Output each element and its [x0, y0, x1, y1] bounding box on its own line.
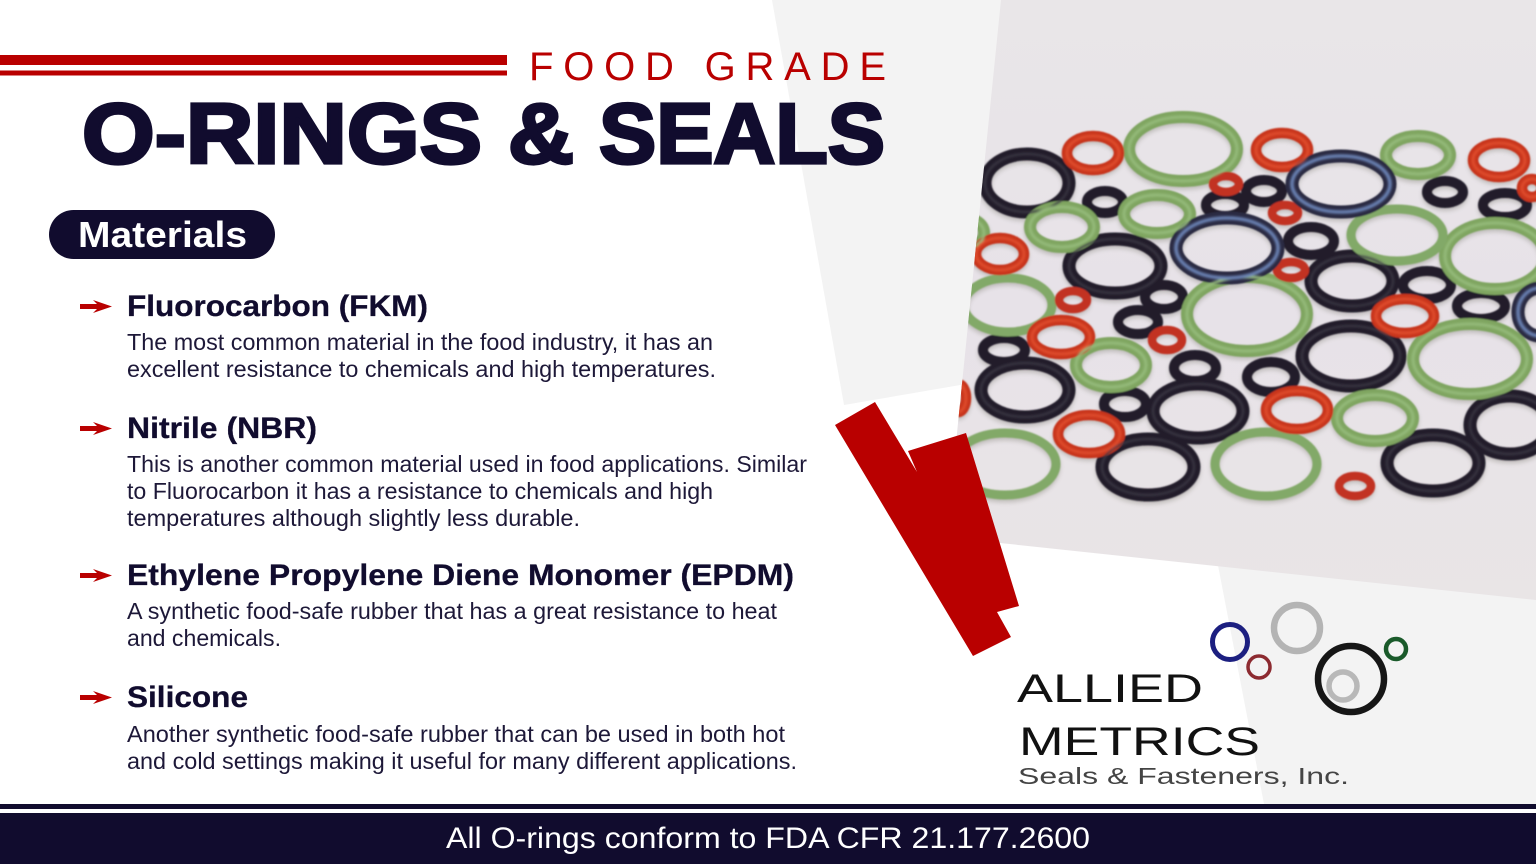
text: Nitrile description: [127, 451, 807, 531]
text: Metrics: METRICS: [1019, 720, 1260, 764]
text: EPDM description: and chemicals.: [127, 625, 281, 651]
icon: arrow: [80, 691, 112, 704]
text: Nitrile description: This is another common material used in food applications. Similar: [127, 451, 807, 477]
text: Allied: ALLIED: [1017, 667, 1203, 711]
text: EPDM description: [127, 598, 778, 651]
icon: arrow: [80, 422, 112, 435]
heading: Fluorocarbon (FKM): Fluorocarbon (FKM): [127, 290, 428, 323]
text: Nitrile description: to Fluorocarbon it has a resistance to chemicals and high: [127, 478, 713, 504]
heading: Ethylene Propylene Diene Monomer (EPDM): Ethylene Propylene Diene Monomer (EPDM): [127, 559, 794, 592]
text: Silicone description: and cold settings making it useful for many different applications.: [127, 748, 797, 774]
text: Fluorocarbon description: excellent resistance to chemicals and high temperatures.: [127, 356, 716, 382]
heading: Food Grade: FOOD GRADE: [529, 45, 886, 89]
text: FDA conformance note: All O-rings conform to FDA CFR 21.177.2600: [446, 822, 1090, 855]
title: O-Rings & Seals: &: [508, 87, 574, 182]
title: O-Rings & Seals: SEALS: [599, 87, 885, 182]
material: EPDM: [80, 559, 794, 651]
text: EPDM description: A synthetic food-safe rubber that has a great resistance to heat: [127, 598, 778, 624]
material: Nitrile: [80, 412, 807, 531]
logo: Allied Metrics: [1017, 605, 1406, 789]
text: Silicone description: [127, 721, 797, 774]
icon: arrow: [80, 300, 112, 313]
text: Fluorocarbon description: [127, 329, 716, 382]
panel: light grey backdrop shape top: [772, 0, 1001, 405]
footer band: [0, 813, 1536, 864]
material: Silicone: [80, 681, 797, 774]
section label: Materials: Materials: [78, 214, 247, 255]
title: O-Rings & Seals: [82, 87, 885, 182]
material: Fluorocarbon: [80, 290, 716, 382]
footer rule: [0, 804, 1536, 809]
text: Fluorocarbon description: The most common material in the food industry, it has an: [127, 329, 713, 355]
title: O-Rings & Seals: O-RINGS: [82, 87, 482, 182]
decorative red double-slash shape: [835, 402, 1019, 656]
section label: Materials: [49, 210, 275, 259]
title accent bars: [0, 55, 507, 76]
text: Silicone description: Another synthetic food-safe rubber that can be used in both hot: [127, 721, 786, 747]
icon: logo rings: [1212, 605, 1406, 712]
text: Seals & Fasteners, Inc.: Seals & Fasteners, Inc.: [1018, 763, 1349, 789]
panel: light grey backdrop shape bottom right: [1216, 555, 1536, 804]
text: Nitrile description: temperatures although slightly less durable.: [127, 505, 580, 531]
heading: Silicone: Silicone: [127, 681, 248, 714]
heading: Nitrile (NBR): Nitrile (NBR): [127, 412, 317, 445]
photo: assorted coloured O-rings: [940, 0, 1536, 610]
icon: arrow: [80, 569, 112, 582]
